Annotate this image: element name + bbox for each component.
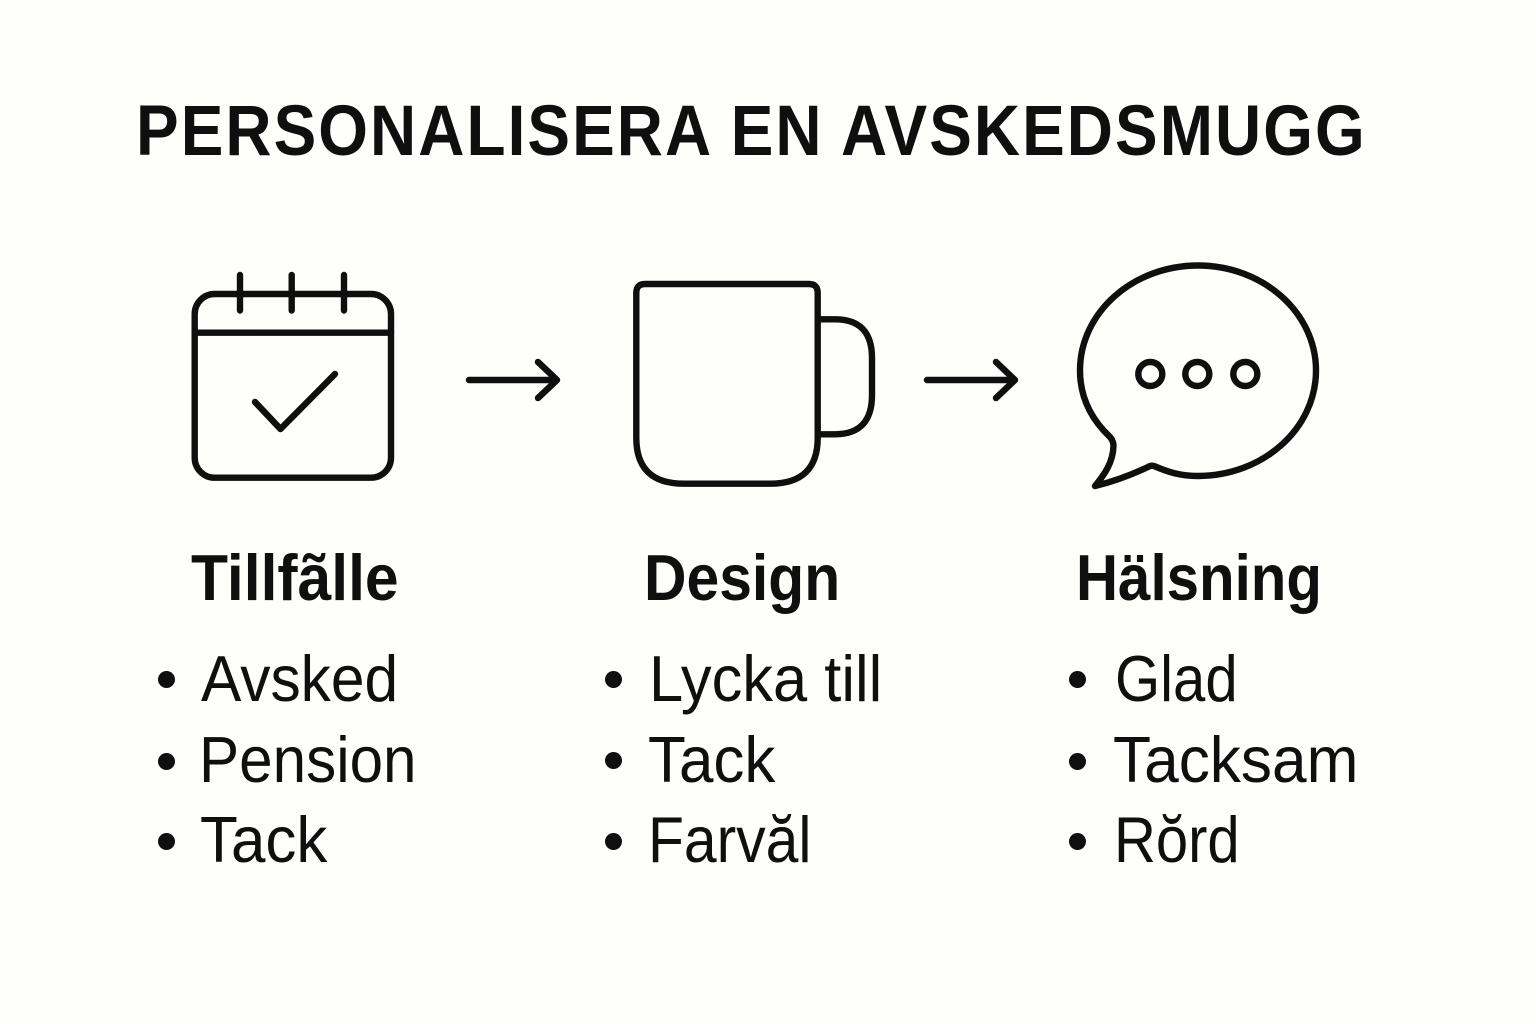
text: Tacksam [1113,722,1358,796]
heading: Design: Design [644,541,840,614]
text: Glad [1114,642,1237,715]
text: Avsked [201,642,398,715]
text: Lycka till [648,642,882,715]
list: Design options [605,642,882,876]
list: Tillfälle options [158,642,416,876]
text: Tack [200,803,327,876]
heading: Hälsning: Hälsning [1076,541,1321,614]
title: PERSONALISERA EN AVSKEDSMUGG [136,92,1366,171]
heading: Tillfälle: Tillfãlle [191,541,399,614]
list: Hälsning options [1069,642,1358,876]
text: Pension [198,722,416,796]
text: Tack [648,722,775,796]
text: Farvăl [648,803,811,876]
text: Rŏrd [1114,803,1239,876]
